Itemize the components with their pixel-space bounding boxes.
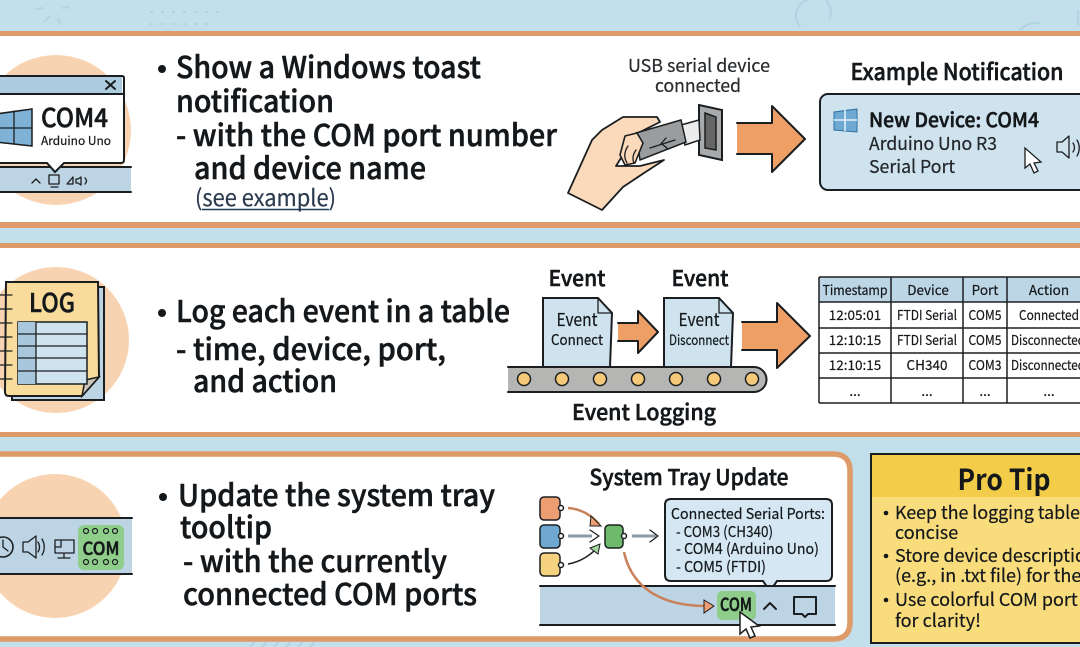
- tooltip: connected ports: - COM4 (Arduino Uno): [676, 538, 819, 559]
- document: disconnect: [664, 298, 733, 367]
- illustration: event conveyor: Event: [548, 261, 606, 293]
- hand palm: [568, 117, 664, 210]
- illustration: event conveyor: [508, 261, 766, 427]
- panel: event log: [0, 243, 1080, 437]
- icon: COM4 toast over taskbar: Arduino Uno: [41, 132, 111, 149]
- table: event log: COM5: [968, 329, 1002, 349]
- document: connect: [543, 298, 612, 367]
- document: connect: Connect: [551, 329, 603, 350]
- text: log bullet: and action: [193, 357, 337, 401]
- callout: example notification: Arduino Uno R3: [869, 130, 997, 156]
- table: event log: FTDI Serial: [897, 329, 957, 349]
- illustration: event conveyor: Event Logging: [572, 395, 716, 427]
- text: tray bullet: connected COM ports: [183, 570, 477, 614]
- callout: example notification: New Device: COM4: [869, 104, 1039, 133]
- illustration: system tray update: [540, 460, 835, 638]
- table: event log: Device: [907, 279, 949, 299]
- table: event log: ...: [849, 380, 861, 400]
- text: tray bullet: - with the currently: [183, 537, 447, 581]
- table: event log: 12:10:15: [829, 329, 881, 349]
- tray bar: [540, 552, 835, 638]
- callout: example notification: Example Notification: [850, 53, 1064, 87]
- callout: example notification: [820, 53, 1080, 190]
- table: event log: ...: [921, 380, 933, 400]
- text: tray bullet: tooltip: [180, 503, 272, 547]
- text: log bullet: [158, 287, 510, 401]
- callout: pro tip: for clarity!: [895, 607, 981, 633]
- text: toast bullet: - with the COM port number: [176, 111, 558, 155]
- text: toast bullet: (see example): [195, 179, 336, 213]
- tooltip: connected ports: [665, 499, 832, 591]
- illustration: USB device plugged in: USB serial device: [628, 52, 770, 78]
- table: event log: CH340: [907, 354, 947, 374]
- panel: system tray: [0, 454, 850, 639]
- callout: pro tip: Keep the logging table: [895, 499, 1080, 525]
- illustration: USB device plugged in: [568, 52, 770, 210]
- panel: toast notification: [0, 31, 1080, 228]
- fingers: [620, 133, 643, 165]
- callout: pro tip: Pro Tip: [958, 457, 1050, 499]
- table: event log: COM5: [968, 304, 1002, 324]
- icon: COM4 toast over taskbar: [0, 55, 131, 205]
- icon: COM4 toast over taskbar: COM4: [41, 98, 108, 135]
- icon: tray with COM badge: COM: [82, 535, 120, 561]
- arrow: to table: [742, 303, 810, 368]
- tray bar: COM: [720, 591, 752, 617]
- callout: pro tip: concise: [895, 519, 958, 545]
- table: event log: Port: [972, 279, 998, 299]
- diagram: device blocks: [540, 497, 626, 576]
- text: log bullet: - time, device, port,: [176, 325, 446, 369]
- icon: tray with COM badge: [0, 474, 132, 618]
- table: event log: ...: [1043, 380, 1055, 400]
- document: connect: Event: [556, 306, 598, 332]
- document: disconnect: Event: [678, 306, 720, 332]
- callout: example notification: Serial Port: [869, 153, 955, 179]
- callout: pro tip: [871, 454, 1080, 643]
- arrow: to notification: [737, 106, 805, 172]
- text: tray bullet: Update the system tray: [178, 471, 495, 515]
- text: tray bullet: [159, 471, 495, 614]
- table: event log: FTDI Serial: [897, 304, 957, 324]
- illustration: USB device plugged in: connected: [655, 72, 741, 98]
- arrow: between events: [618, 311, 658, 353]
- tooltip: connected ports: - COM5 (FTDI): [676, 556, 766, 577]
- table: event log: 12:10:15: [829, 354, 881, 374]
- text: toast bullet: notification: [176, 77, 334, 121]
- text: toast bullet: Show a Windows toast: [176, 43, 481, 87]
- table: event log: ...: [979, 380, 991, 400]
- table: event log: Timestamp: [822, 279, 888, 299]
- icon: log notebook: [0, 267, 129, 413]
- table: event log: 12:05:01: [829, 304, 881, 324]
- text: toast bullet: [158, 43, 558, 213]
- illustration: event conveyor: Event: [672, 261, 729, 293]
- table: event log: [819, 277, 1080, 403]
- table: event log: COM3: [968, 354, 1002, 374]
- tooltip: connected ports: - COM3 (CH340): [676, 521, 773, 542]
- icon: log notebook: LOG: [29, 283, 75, 320]
- text: toast bullet: and device name: [194, 144, 426, 188]
- tooltip: connected ports: Connected Serial Ports:: [671, 503, 825, 524]
- illustration: system tray update: System Tray Update: [590, 460, 788, 492]
- conveyor belt: [508, 367, 766, 392]
- table: event log: Action: [1029, 279, 1069, 299]
- document: disconnect: Disconnect: [669, 330, 730, 350]
- text: log bullet: Log each event in a table: [176, 287, 510, 331]
